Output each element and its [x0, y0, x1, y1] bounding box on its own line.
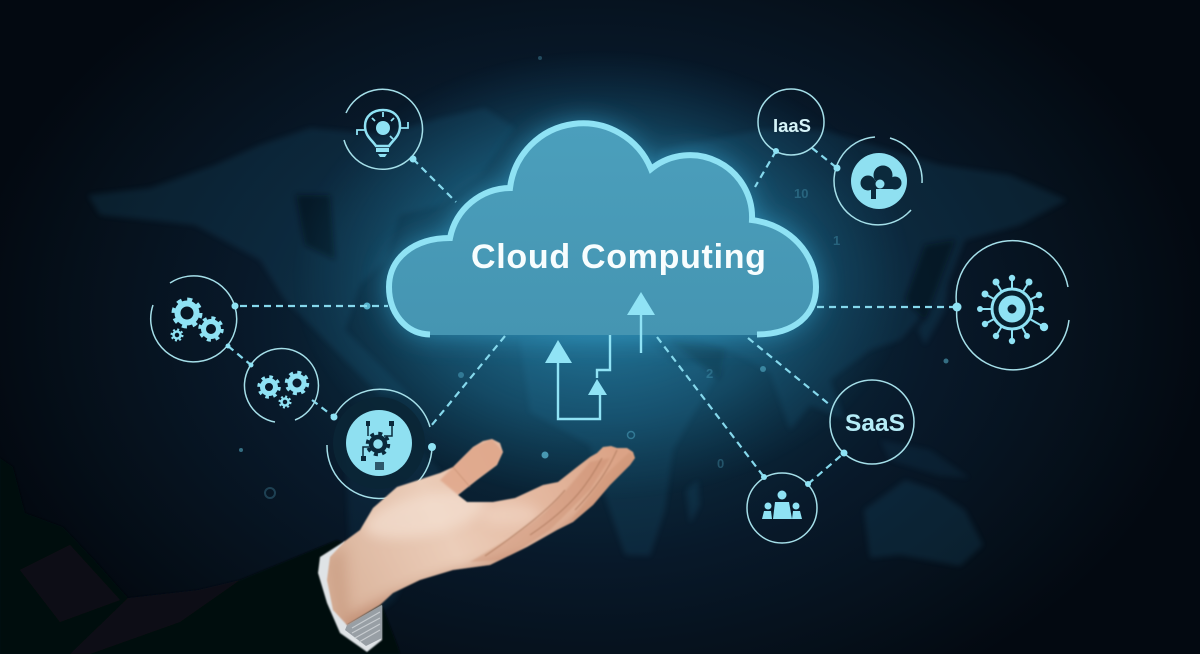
icon: team [747, 473, 817, 543]
icon: cloud tree [834, 137, 922, 225]
dashed connectors [228, 148, 957, 484]
title: Cloud Computing [471, 238, 767, 276]
suit sleeve [0, 458, 400, 654]
hand [325, 439, 640, 640]
icon: hub network [952, 241, 1069, 370]
icon: gears circle one [151, 276, 238, 362]
upload arrows [545, 292, 655, 419]
icon: process automation [327, 389, 436, 499]
faint binary digits [706, 186, 840, 471]
icon: light bulb [344, 89, 423, 169]
shirt cuff [318, 541, 382, 652]
IaaS badge [758, 89, 824, 155]
dark map patches [296, 195, 955, 380]
SaaS badge [830, 380, 914, 464]
faint binary digits: 1 [833, 233, 840, 248]
particles [239, 56, 948, 498]
cloud [389, 123, 816, 335]
IaaS badge: IaaS [773, 115, 811, 136]
icon: gears circle two [244, 349, 318, 422]
cloud glow [292, 50, 912, 500]
SaaS badge: SaaS [845, 410, 905, 437]
faint binary digits: 10 [794, 186, 808, 201]
faint binary digits: 0 [717, 456, 724, 471]
world map [88, 108, 1067, 620]
faint binary digits: 2 [706, 366, 713, 381]
